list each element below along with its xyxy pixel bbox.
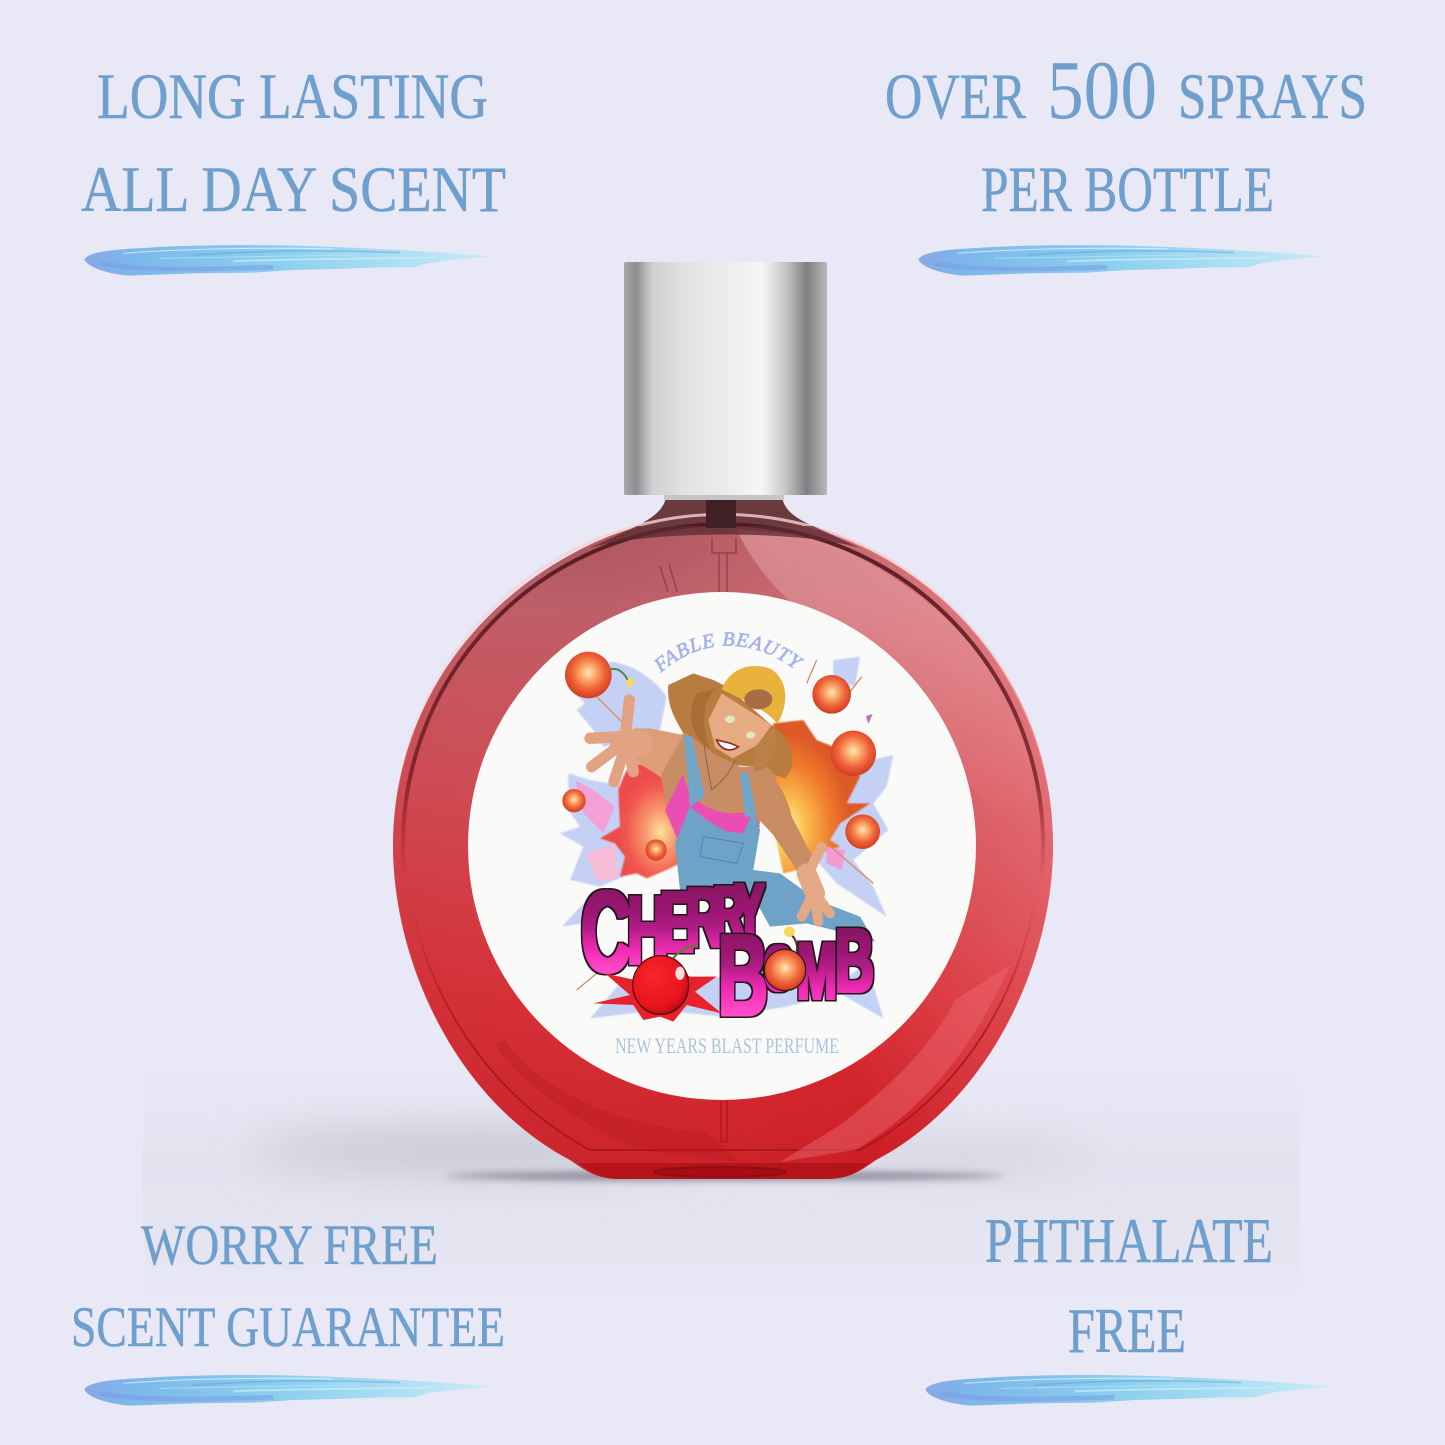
graffiti word: cherry: C <box>581 869 631 997</box>
woman figure <box>590 666 875 942</box>
divider brush stroke top left <box>84 245 492 276</box>
graffiti word: bomb: B <box>835 910 874 1011</box>
graffiti word: cherry: E <box>660 875 694 970</box>
streak lines <box>577 660 873 990</box>
lower inner contour <box>411 900 1035 1150</box>
lower arm <box>752 773 815 875</box>
graffiti word: cherry: H <box>627 876 669 984</box>
graffiti word: cherry: R <box>713 872 745 955</box>
outer pale rim <box>396 514 1050 800</box>
heading: worry free scent guarantee: WORRY FREE <box>141 1214 438 1277</box>
pink paint spots <box>575 780 615 833</box>
heading: over 500 sprays per bottle: OVER <box>885 61 1027 133</box>
heading: worry free scent guarantee: SCENT GUARANTEE <box>71 1296 505 1359</box>
pink tank top <box>665 773 760 845</box>
open hand <box>802 847 830 922</box>
hat <box>722 666 785 724</box>
cherries <box>562 652 880 861</box>
overalls straps <box>684 735 757 817</box>
light reflection upper right <box>737 530 1048 820</box>
heading: long lasting all day scent: LONG LASTING <box>97 61 488 133</box>
graffiti word: cherry: Y <box>735 868 764 951</box>
body side shading <box>393 526 1053 1179</box>
divider brush stroke bottom right <box>925 1375 1333 1406</box>
inner dark rim <box>403 524 1043 880</box>
heading: over 500 sprays per bottle: SPRAYS <box>1178 61 1367 133</box>
brand name: FABLE BEAUTY <box>654 632 805 674</box>
big red cherry <box>633 945 697 1014</box>
dip tube bottom <box>721 1101 727 1142</box>
red paint splash <box>600 762 687 878</box>
orange paint splash <box>767 720 870 873</box>
heading: phthalate free <box>985 1206 1273 1366</box>
divider brush stroke top right <box>918 245 1326 276</box>
shoulder shadow <box>590 526 860 548</box>
red splat <box>593 960 722 1022</box>
heading: phthalate free: PHTHALATE <box>985 1206 1273 1276</box>
heading: worry free scent guarantee <box>71 1214 505 1359</box>
necklace <box>703 740 735 790</box>
hair front <box>691 688 717 748</box>
graffiti word: bomb: M <box>797 926 837 1015</box>
blue paint splashes <box>560 657 893 1018</box>
silver cap <box>624 262 827 495</box>
white round label <box>468 592 976 1100</box>
graffiti word: bomb: B <box>718 912 768 1040</box>
graffiti word: bomb <box>718 910 874 1040</box>
raised arm <box>628 728 683 777</box>
graffiti word: bomb: O <box>764 934 794 1005</box>
overalls pocket <box>700 837 743 863</box>
heading: phthalate free: FREE <box>1068 1296 1186 1366</box>
raised hand with fingers <box>590 700 640 782</box>
bottle body <box>393 526 1053 1179</box>
floor and bottle shadow <box>143 1040 1300 1300</box>
graffiti word: cherry <box>581 868 764 997</box>
heading: long lasting all day scent <box>81 61 506 226</box>
hat opening <box>744 689 772 709</box>
heading: over 500 sprays per bottle: 500 <box>1047 44 1157 137</box>
hair back <box>668 673 792 778</box>
label artwork <box>560 632 894 1040</box>
product name: NEW YEARS BLAST PERFUME <box>615 1033 839 1058</box>
lower right reflection <box>780 965 1010 1162</box>
heading: over 500 sprays per bottle <box>885 44 1367 226</box>
dip tube top <box>660 538 736 592</box>
overalls <box>675 807 875 942</box>
graffiti word: cherry: R <box>686 871 722 965</box>
torso and shoulders <box>660 733 777 840</box>
heading: long lasting all day scent: ALL DAY SCENT <box>81 154 506 226</box>
heading: over 500 sprays per bottle: PER BOTTLE <box>981 154 1274 226</box>
bottle neck <box>637 497 813 526</box>
perfume bottle <box>393 262 1053 1179</box>
face <box>708 693 772 758</box>
cherry bomb on letter O <box>764 926 806 991</box>
base punt <box>578 1163 868 1179</box>
lower left reflection <box>495 1040 740 1162</box>
collar <box>664 495 784 500</box>
divider brush stroke bottom left <box>84 1375 492 1406</box>
